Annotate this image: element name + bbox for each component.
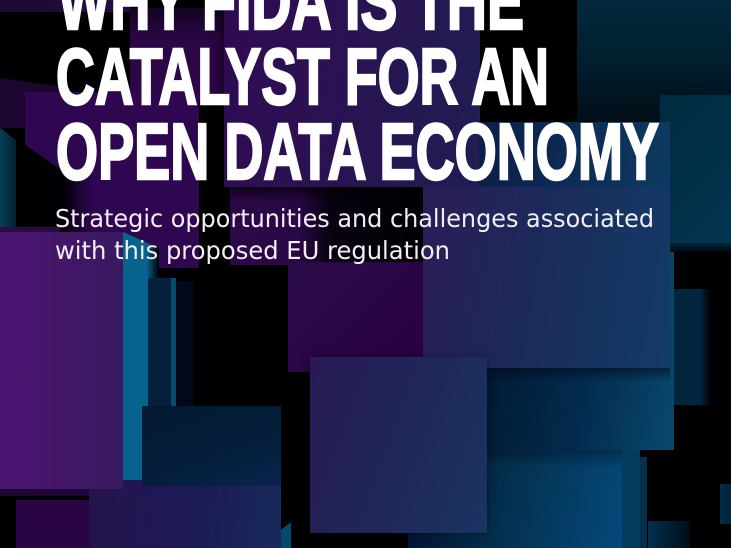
subtitle: [55, 204, 654, 265]
block: big left purple: [0, 232, 123, 489]
block: dark column right: [176, 281, 193, 406]
block: central blue panel: [423, 187, 670, 368]
block: right mid navy: [674, 289, 711, 405]
shadow: under central panel: [487, 368, 670, 382]
block: teal top fade: [123, 232, 159, 278]
block: right teal lower edge: [670, 243, 731, 252]
block: lower right navy: [487, 368, 674, 450]
block: central blue panel upper: [479, 122, 670, 190]
block: centre indigo: [310, 357, 487, 533]
block: dark purple middle: [230, 187, 425, 265]
block: top edge of big purple: [0, 227, 60, 232]
block: lower right thin side: [640, 457, 647, 548]
block: upper-left purple: [25, 92, 199, 268]
block: big left teal side: [123, 272, 148, 490]
block: lower indigo: [89, 480, 281, 548]
block: central panel edge: [670, 252, 674, 368]
block: bottom-left dark purple: [16, 500, 89, 548]
block: thin teal slat: [171, 278, 176, 406]
shadow: upper-left block diagonal: [25, 145, 89, 232]
block: dark navy upper: [142, 406, 281, 486]
block: top-right navy: [577, 0, 731, 124]
subtitle: Strategic opportunities and challenges associated: [55, 204, 654, 233]
block: right teal: [660, 95, 731, 243]
subtitle: with this proposed EU regulation: [55, 236, 450, 265]
block: lower right side: [622, 450, 640, 548]
block: teal wedge: [281, 522, 291, 548]
block: band below big purple: [0, 489, 89, 496]
block: top purple strip: [130, 8, 230, 100]
title: [56, 0, 659, 196]
shadow: under lower right navy: [487, 450, 622, 468]
block: far right teal: [720, 484, 731, 524]
block: dark teal column: [148, 278, 171, 406]
block: top centre indigo: [224, 0, 480, 187]
block: left dark purple wedge: [0, 78, 70, 128]
block: top-left purple band: [0, 0, 130, 12]
block: lower blue behind: [408, 450, 622, 548]
block: bottom-right navy: [648, 521, 690, 548]
block: left teal sliver: [0, 128, 16, 228]
block: mid purple behind: [288, 262, 424, 372]
